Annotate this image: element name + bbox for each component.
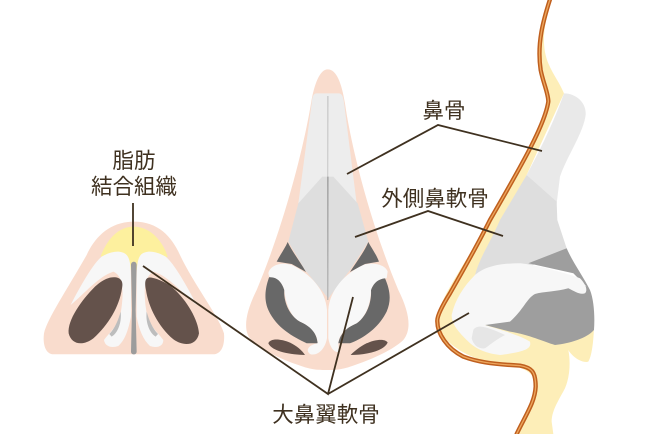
- upper lateral cartilage: [288, 177, 368, 298]
- fat layer: [437, 0, 594, 434]
- nostril right: [351, 340, 388, 355]
- white cartilage left: [268, 264, 327, 355]
- lateral cartilage side: [475, 175, 567, 275]
- label: nasal bone: 鼻骨: [422, 99, 466, 123]
- label: fat and connective tissue: 結合組織: [91, 175, 177, 199]
- dorsal centre line: [327, 96, 329, 177]
- illustration: nose from front: [246, 69, 409, 370]
- illustration: nose from below: [44, 222, 224, 354]
- nasal bone side: [527, 93, 586, 203]
- alar grey blob: [472, 327, 505, 348]
- nasal bone: [298, 93, 357, 203]
- lower cartilage dark: [485, 248, 594, 345]
- dark wings upper: [277, 242, 306, 272]
- inner grey accents: [109, 312, 121, 337]
- leader lines: nasal bone: [347, 125, 542, 174]
- dark lateral crus left: [265, 277, 318, 343]
- label: lateral nasal cartilage: 外側鼻軟骨: [381, 187, 489, 211]
- skin outline: [437, 0, 550, 434]
- nostril left: [268, 339, 305, 355]
- alar cartilage white: [452, 263, 586, 355]
- label: fat and connective tissue: [91, 149, 177, 199]
- white cartilage right: [137, 252, 197, 347]
- white cartilage right: [328, 264, 388, 352]
- illustration: nose side profile: [437, 0, 594, 434]
- white cartilage left: [71, 252, 131, 347]
- label: fat and connective tissue: 脂肪: [112, 149, 156, 173]
- nostril right: [145, 278, 199, 344]
- leader lines: lateral nasal cartilage: [355, 211, 503, 237]
- septum: [131, 262, 137, 354]
- leader line: fat tissue: [132, 203, 134, 246]
- label: greater alar cartilage: 大鼻翼軟骨: [272, 403, 380, 427]
- nostril left: [69, 277, 122, 343]
- dark lateral crus right: [338, 278, 390, 343]
- leader lines: greater alar cartilage: [143, 266, 469, 394]
